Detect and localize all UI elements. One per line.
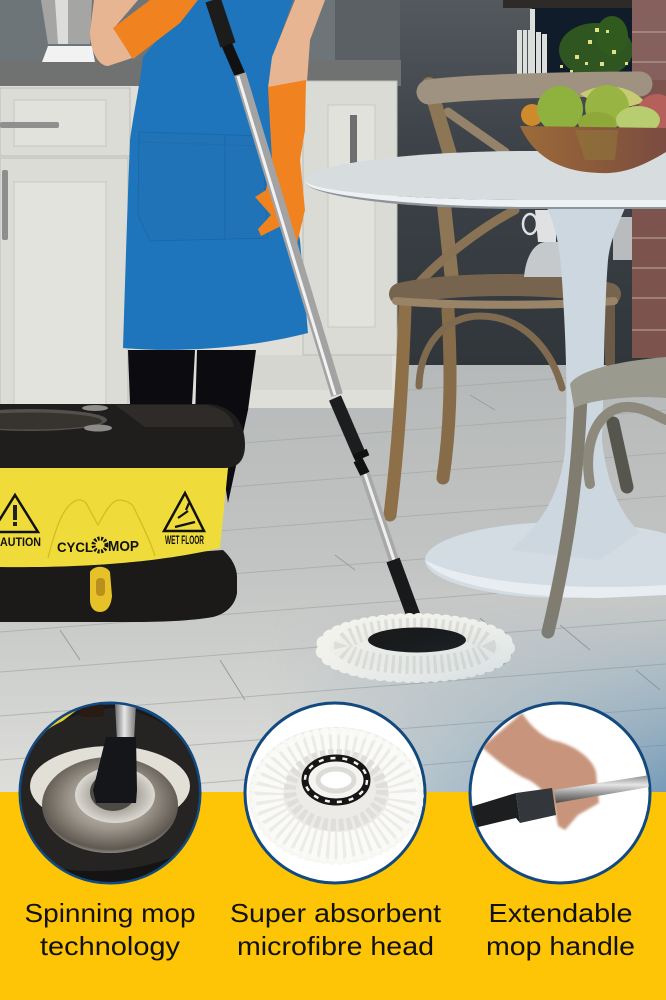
blender on counter xyxy=(41,0,95,62)
mop bucket xyxy=(0,404,245,622)
back chair xyxy=(390,84,640,515)
wet floor sign xyxy=(164,493,204,547)
caption: spinning mop technology: Spinning mop xyxy=(24,898,195,928)
bottom-right blue tint xyxy=(324,617,666,792)
logo: CYCL xyxy=(57,539,93,555)
caption: extendable mop handle xyxy=(486,898,635,961)
caution sign xyxy=(0,495,41,549)
person: blue apron xyxy=(123,0,308,350)
mop head xyxy=(320,619,512,681)
orange gloves xyxy=(113,0,306,248)
brick wall xyxy=(632,0,666,358)
table with pedestal xyxy=(305,151,666,598)
person: arms xyxy=(90,0,325,88)
circle photo: extendable handle xyxy=(470,703,650,883)
circle photo: microfibre head xyxy=(245,703,425,883)
plant xyxy=(559,16,633,77)
feature 1: spinning mop xyxy=(20,700,200,961)
fruit bowl xyxy=(520,85,666,173)
mop handle xyxy=(213,0,418,628)
dishes behind table xyxy=(523,210,632,277)
caption: spinning mop technology: technology xyxy=(40,931,180,961)
logo: MOP xyxy=(108,538,139,555)
wet floor sign: WET FLOOR xyxy=(165,533,204,547)
circle photo: spinning bucket xyxy=(20,700,200,890)
caption: extendable mop handle: Extendable xyxy=(488,898,632,928)
caption: super absorbent microfibre head xyxy=(230,898,442,961)
caption: spinning mop technology xyxy=(24,898,195,961)
person: legs xyxy=(128,350,256,503)
shelf with books xyxy=(503,0,632,80)
caution sign: AUTION xyxy=(0,535,41,549)
feature 3: extendable handle xyxy=(470,703,650,961)
logo xyxy=(57,538,139,555)
caption: super absorbent microfibre head: Super absorbent xyxy=(230,898,442,928)
yellow band xyxy=(0,792,666,1000)
front chair xyxy=(548,357,666,632)
caption: super absorbent microfibre head: microfibre head xyxy=(237,931,434,961)
caption: extendable mop handle: mop handle xyxy=(486,931,635,961)
kitchen photo background xyxy=(0,0,666,800)
kitchen cabinets xyxy=(0,60,401,408)
feature 2: microfibre head xyxy=(230,703,442,961)
bucket spout xyxy=(90,567,112,612)
